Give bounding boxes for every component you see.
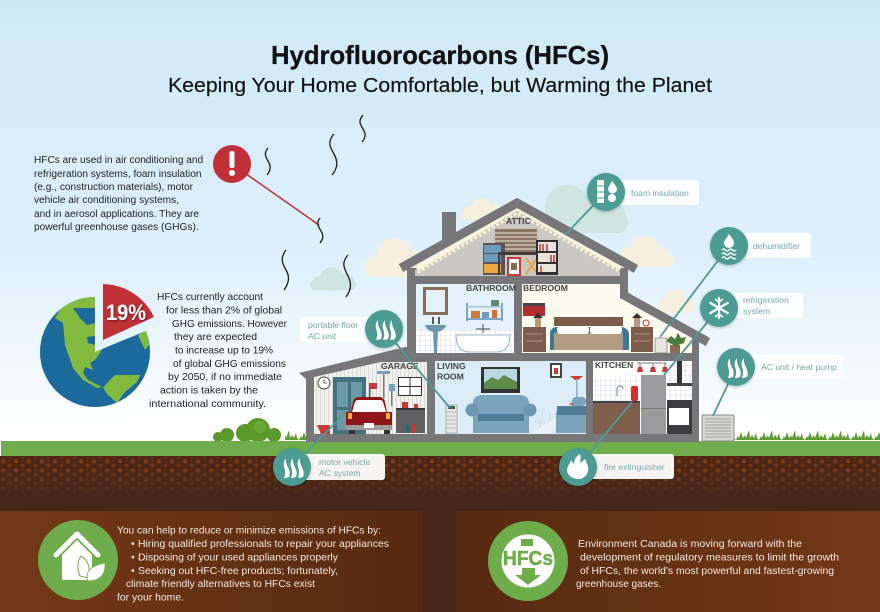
ground: grass tufts [285, 431, 880, 442]
callout lines [292, 192, 736, 467]
house: wall and floor structure [299, 268, 699, 442]
text: current share of emissions: for less than 2% of global [166, 306, 282, 316]
callout: foam insulation: foam insulation [631, 188, 689, 198]
room: bedroom: BEDROOM [523, 283, 568, 293]
text: regulatory measures: of HFCs, the world's most powerful and fastest-growing [580, 565, 834, 577]
callout: motor vehicle AC system: AC system [319, 468, 361, 478]
text: regulatory measures: Environment Canada is moving forward with the [578, 538, 802, 550]
text: current share of emissions: international community. [149, 399, 266, 410]
text: current share of emissions: they are expected [174, 332, 257, 343]
room: living room: ROOM [437, 372, 464, 382]
title: Keeping Your Home Comfortable, but Warming the Planet [168, 74, 712, 97]
globe with 19% wedge [40, 284, 160, 407]
callout: AC unit / heat pump: AC unit / heat pump [761, 362, 837, 372]
callout: portable floor AC unit: portable floor [308, 320, 358, 330]
AC outdoor unit [702, 415, 734, 441]
ground: lawn [1, 441, 880, 456]
room: kitchen [593, 360, 692, 434]
bush [213, 418, 281, 442]
icon: alert with leader line [213, 145, 319, 225]
house: attic: ATTIC [506, 216, 531, 226]
text: ways to help [117, 524, 389, 604]
text: ways to help: You can help to reduce or minimize emissions of HFCs by: [117, 524, 381, 536]
callout: dehumidifier: dehumidifier [753, 241, 800, 251]
text: current share of emissions: of global GHG emissions [173, 359, 286, 370]
text: regulatory measures: greenhouse gases. [576, 578, 661, 590]
house: roof [401, 203, 708, 342]
room: bathroom: BATHROOM [466, 283, 516, 293]
intro text block: and in aerosol applications. They are [34, 209, 199, 220]
text: regulatory measures [576, 538, 839, 590]
intro text block: powerful greenhouse gases (GHGs). [34, 222, 199, 233]
icon: HFCs down arrow [488, 521, 568, 601]
callout: refrigeration system: system [743, 306, 770, 316]
ground: soil [0, 456, 880, 612]
callout: refrigeration system: refrigeration [743, 295, 789, 305]
icon: HFCs down arrow: HFCs [503, 548, 553, 570]
text: current share of emissions: GHG emissions. However [172, 319, 288, 330]
callout: fire extinguisher [559, 448, 674, 486]
text: regulatory measures: development of regulatory measures to limit the growth [580, 552, 839, 564]
callout: AC unit / heat pump [717, 348, 843, 386]
title [168, 40, 712, 97]
house: attic [415, 207, 621, 276]
text: current share of emissions: action is taken by the [160, 386, 258, 396]
house: chimney [442, 212, 456, 242]
rising HFC emission squiggles [265, 115, 365, 297]
callout: dehumidifier [710, 227, 811, 265]
intro text block: vehicle air conditioning systems, [34, 195, 179, 206]
room: garage: GARAGE [381, 361, 419, 371]
clouds [310, 185, 696, 313]
intro text block: HFCs are used in air conditioning and [34, 155, 203, 166]
room: kitchen: KITCHEN [595, 360, 633, 370]
text: ways to help: Seeking out HFC-free products; fortunately, [138, 565, 338, 577]
text: current share of emissions: by 2050, if no immediate [168, 372, 282, 383]
icon: green home with leaves [38, 520, 118, 600]
house [299, 203, 708, 442]
intro text block [34, 155, 203, 233]
text: ways to help: • [131, 538, 135, 550]
intro text block: refrigeration systems, foam insulation [34, 169, 201, 180]
callout: refrigeration system [700, 289, 803, 327]
text: current share of emissions: to increase up to 19% [175, 346, 273, 356]
text: ways to help: • [131, 552, 135, 564]
background: sky [0, 0, 880, 442]
text: ways to help: climate friendly alternatives to HFCs exist [126, 578, 315, 590]
title: Hydrofluorocarbons (HFCs) [271, 40, 609, 70]
callout: motor vehicle AC system: motor vehicle [319, 457, 370, 467]
text: current share of emissions [149, 292, 288, 410]
room: bedroom [522, 283, 692, 353]
text: ways to help: Hiring qualified professionals to repair your appliances [138, 538, 389, 550]
intro text block: (e.g., construction materials), motor [34, 182, 194, 193]
room: living room: LIVING [437, 361, 466, 371]
text: ways to help: • [131, 565, 135, 577]
room: bathroom [416, 283, 516, 353]
panel: regulation [456, 511, 880, 612]
callout: portable floor AC unit [300, 310, 403, 348]
callout: portable floor AC unit: AC unit [308, 331, 337, 341]
room: garage [314, 361, 427, 434]
globe with 19% wedge: 19% [106, 300, 146, 325]
callout: fire extinguisher: fire extinguisher [604, 462, 665, 472]
text: ways to help: Disposing of your used appliances properly [138, 552, 339, 564]
callout: foam insulation [587, 173, 699, 211]
text: current share of emissions: HFCs currently account [157, 292, 263, 303]
room: living room [435, 361, 586, 434]
text: ways to help: for your home. [117, 592, 184, 604]
panel: what you can do [0, 511, 423, 612]
callout: motor vehicle AC system [273, 448, 385, 486]
